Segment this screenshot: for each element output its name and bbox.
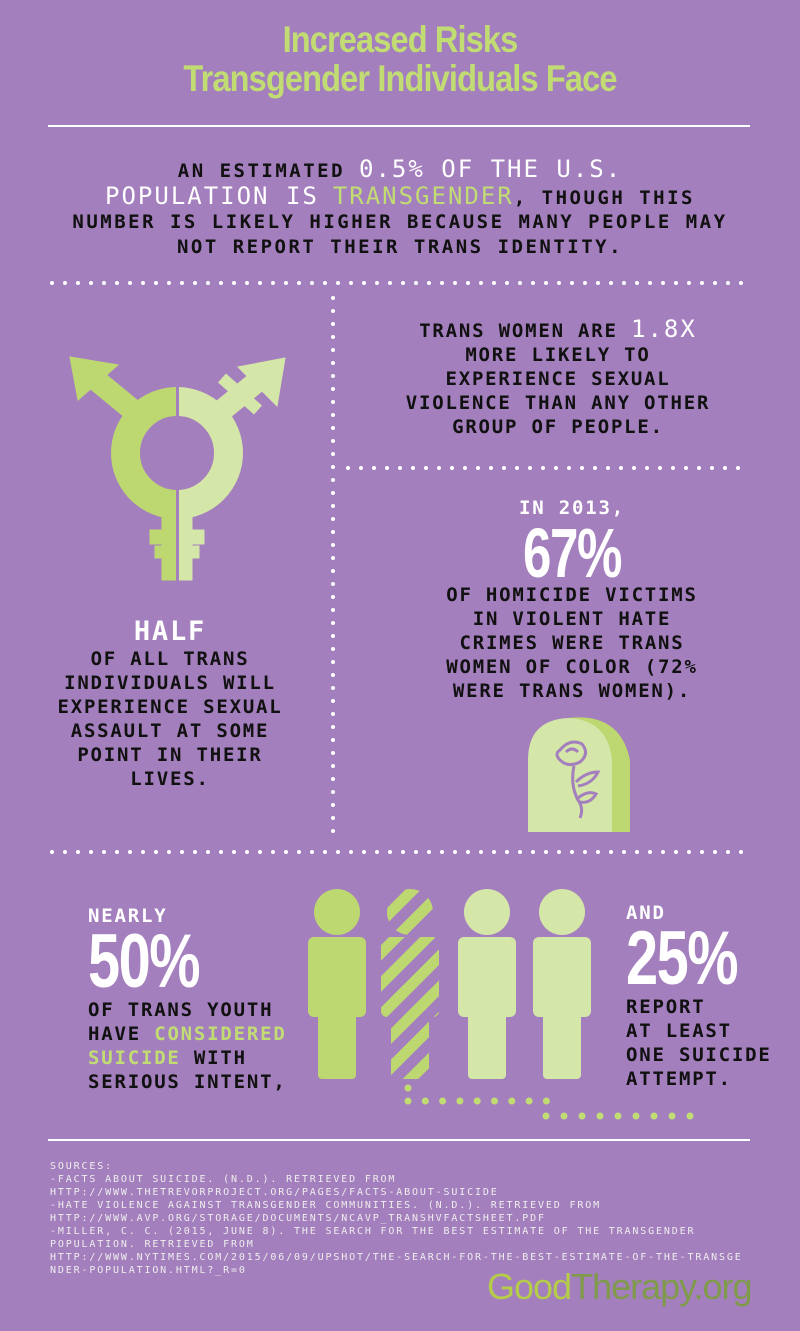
icon: four people figures	[308, 889, 694, 1120]
text: 25%: AND	[626, 902, 666, 924]
text: half: ASSAULT AT SOME	[71, 720, 269, 742]
text: CRIMES WERE TRANS	[459, 632, 685, 654]
title	[183, 19, 617, 99]
text: 1.8x: TRANS WOMEN ARE 1.8X	[419, 315, 697, 343]
text: 50%: NEARLY	[88, 905, 167, 927]
icon: tombstone with rose	[528, 717, 630, 832]
title: Transgender Individuals Face	[183, 58, 617, 99]
text: 1.8x: VIOLENCE THAN ANY OTHER	[406, 392, 710, 414]
text: 25%: AT LEAST	[626, 1020, 732, 1042]
logo: GoodTherapy.org: GoodTherapy.org	[487, 1266, 752, 1307]
text: WERE TRANS WOMEN).	[453, 680, 691, 702]
sources: -HATE VIOLENCE AGAINST TRANSGENDER COMMUNITIES. (N.D.). RETRIEVED FROM	[50, 1200, 601, 1211]
sources: HTTP://WWW.AVP.ORG/STORAGE/DOCUMENTS/NCAVP_TRANSHVFACTSHEET.PDF	[50, 1213, 546, 1224]
intro text: AN ESTIMATED 0.5% OF THE U.S.	[178, 155, 622, 183]
title: Increased Risks	[283, 19, 517, 60]
sources: HTTP://WWW.THETREVORPROJECT.ORG/PAGES/FACTS-ABOUT-SUICIDE	[50, 1187, 499, 1198]
intro text: NUMBER IS LIKELY HIGHER BECAUSE MANY PEOPLE MAY	[72, 211, 728, 233]
sources: HTTP://WWW.NYTIMES.COM/2015/06/09/UPSHOT/THE-SEARCH-FOR-THE-BEST-ESTIMATE-OF-THE-TRANSGE	[50, 1252, 743, 1263]
sources: POPULATION. RETRIEVED FROM	[50, 1239, 255, 1250]
text: 50%: SUICIDE WITH	[88, 1047, 247, 1069]
text: 50%: OF TRANS YOUTH	[88, 999, 273, 1021]
intro text: POPULATION IS TRANSGENDER, THOUGH THIS	[105, 182, 695, 210]
text: half: HALF	[134, 616, 206, 647]
text: 1.8x: MORE LIKELY TO	[465, 344, 651, 366]
text: half: LIVES.	[130, 768, 210, 790]
sources: -MILLER, C. C. (2015, JUNE 8). THE SEARCH FOR THE BEST ESTIMATE OF THE TRANSGENDER	[50, 1226, 695, 1237]
icon: transgender symbol	[69, 356, 286, 580]
text: OF HOMICIDE VICTIMS	[446, 584, 698, 606]
text: 1.8x	[406, 315, 710, 438]
text: 25%: ATTEMPT.	[626, 1068, 732, 1090]
sources: NDER-POPULATION.HTML?_R=0	[50, 1265, 247, 1276]
text: 67%	[523, 514, 621, 592]
text: 25%	[626, 902, 772, 1090]
text: 50%: SERIOUS INTENT,	[88, 1071, 287, 1093]
text: 25%: REPORT	[626, 996, 705, 1018]
text: 67%: IN 2013,	[519, 497, 625, 519]
text: IN VIOLENT HATE	[473, 608, 671, 630]
text: half: EXPERIENCE SEXUAL	[57, 696, 283, 718]
text: 50%: 50%	[88, 919, 199, 1004]
text: 25%: 25%	[626, 916, 737, 1001]
sources	[50, 1161, 743, 1276]
text: half: INDIVIDUALS WILL	[64, 672, 276, 694]
text: WOMEN OF COLOR (72%	[446, 656, 698, 678]
intro text: NOT REPORT THEIR TRANS IDENTITY.	[177, 236, 623, 258]
text: 50%: HAVE CONSIDERED	[88, 1023, 287, 1045]
text: 50%	[88, 905, 287, 1093]
text: 1.8x: EXPERIENCE SEXUAL	[445, 368, 671, 390]
text: 67%	[446, 497, 698, 702]
sources: -FACTS ABOUT SUICIDE. (N.D.). RETRIEVED FROM	[50, 1174, 396, 1185]
text: half: OF ALL TRANS	[91, 648, 249, 670]
intro text	[72, 155, 728, 258]
text: 1.8x: GROUP OF PEOPLE.	[452, 416, 664, 438]
text: half	[57, 616, 283, 790]
sources: SOURCES:	[50, 1161, 113, 1172]
text: 25%: ONE SUICIDE	[626, 1044, 772, 1066]
text: half: POINT IN THEIR	[77, 744, 263, 766]
